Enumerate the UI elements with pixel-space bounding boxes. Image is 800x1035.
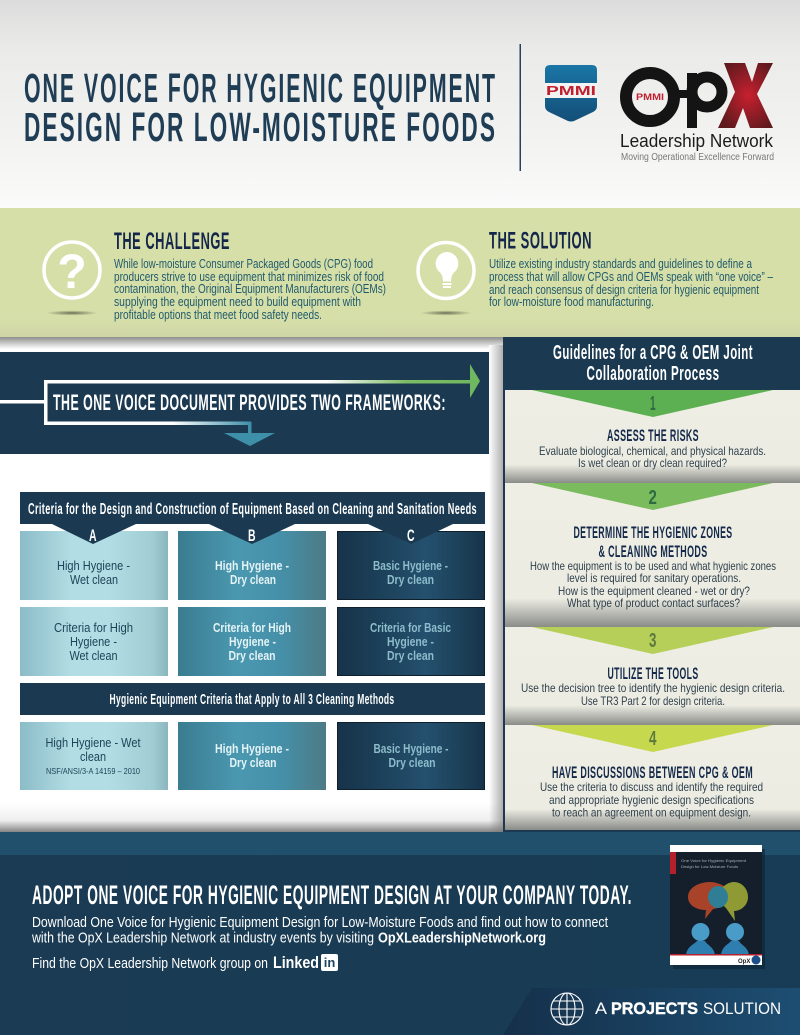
header divider [520, 44, 521, 171]
text: download copy: Download One Voice for Hygienic Equipment Design for Low-Moisture Foods and find out how to connect [32, 915, 608, 931]
heading: frameworks: THE ONE VOICE DOCUMENT PROVIDES TWO FRAMEWORKS: [53, 390, 446, 415]
step 2: 2 [648, 487, 658, 509]
header bar: criteria: Criteria for the Design and Construction of Equipment Based on Cleaning and Sanitation Needs [28, 501, 477, 518]
column C row 3: Basic Hygiene - [374, 742, 448, 756]
image: report cover: One Voice for Hygienic Equipment [681, 858, 747, 863]
step 3: 3 [649, 630, 657, 652]
column B row 2 [178, 607, 326, 676]
image: report cover [670, 845, 765, 969]
column C row 1: Dry clean [387, 573, 434, 587]
logo: OpX Leadership Network: Leadership Network [620, 131, 774, 151]
logo: PMMI shield [545, 65, 597, 122]
column C row 3: Dry clean [388, 756, 436, 770]
header bar: criteria: C [407, 526, 415, 545]
column A row 3: clean [80, 750, 106, 764]
badge: a projects solution [503, 988, 800, 1035]
panel: guidelines [503, 337, 800, 832]
text: challenge body [114, 257, 386, 322]
heading: the challenge: THE CHALLENGE [114, 228, 230, 255]
heading: guidelines [553, 342, 753, 385]
text: download copy: OpXLeadershipNetwork.org [378, 930, 546, 946]
text: challenge body: supplying the equipment need to build equipment with [114, 295, 361, 309]
text: solution body: for low-moisture food manufacturing. [489, 295, 654, 309]
column A row 3 [20, 722, 168, 790]
column B row 3: Dry clean [230, 756, 276, 770]
column B row 2: Hygiene - [229, 635, 276, 649]
panel: footer call to action [0, 832, 800, 1035]
column A row 3: High Hygiene - Wet [46, 736, 141, 750]
column B row 1 [178, 531, 326, 600]
column A row 1: High Hygiene - [57, 559, 130, 573]
header bar: criteria [20, 492, 485, 545]
step 4: and appropriate hygienic design specifications [549, 793, 754, 807]
step 1: Is wet clean or dry clean required? [578, 456, 727, 470]
column C row 1: Basic Hygiene - [373, 559, 448, 573]
column C row 2: Criteria for Basic [370, 621, 451, 635]
column B row 2: Criteria for High [213, 621, 291, 635]
heading: the solution: THE SOLUTION [489, 228, 592, 254]
header panel [0, 0, 800, 208]
title [24, 65, 497, 150]
step 3: UTILIZE THE TOOLS [608, 664, 698, 683]
column B row 1: Dry clean [230, 573, 276, 587]
image: report cover: OpX [738, 959, 750, 965]
step 4 [505, 725, 800, 830]
header bar: all three methods: Hygienic Equipment Criteria that Apply to All 3 Cleaning Methods [110, 691, 394, 708]
column B row 3: High Hygiene - [215, 742, 289, 756]
column A row 1: Wet clean [70, 573, 118, 587]
step 2: level is required for sanitary operations. [567, 571, 741, 585]
step 3: Use TR3 Part 2 for design criteria. [581, 694, 725, 708]
header bar: criteria: B [248, 526, 256, 545]
icon: light bulb [418, 242, 474, 316]
arrow: green framework arrow [0, 364, 480, 425]
arrow: blue framework arrow [44, 422, 275, 446]
step 1: 1 [650, 393, 656, 415]
column A row 3: NSF/ANSI/3-A 14159 – 2010 [46, 766, 140, 776]
column A row 2: Criteria for High [54, 621, 133, 635]
column C row 2: Hygiene - [387, 635, 434, 649]
panel: two frameworks [0, 337, 503, 832]
icon: globe [551, 993, 583, 1025]
logo: OpX Leadership Network: PMMI [636, 92, 664, 102]
column A row 2: Wet clean [70, 649, 118, 663]
text: challenge body: profitable options that meet food safety needs. [114, 308, 322, 322]
table: criteria [20, 492, 485, 790]
logo: OpX Leadership Network: Moving Operational Excellence Forward [621, 152, 774, 163]
text: challenge body: While low-moisture Consumer Packaged Goods (CPG) food [114, 257, 373, 271]
column A row 2: Hygiene - [70, 635, 117, 649]
column C row 2: Dry clean [387, 649, 434, 663]
header bar: all three methods [20, 683, 485, 715]
banner [0, 352, 489, 454]
logo: PMMI shield: PMMI [546, 83, 596, 98]
logo: OpX Leadership Network [620, 63, 774, 163]
text: download copy: Find the OpX Leadership Network group on [32, 956, 268, 972]
panel: challenge and solution band [0, 208, 800, 337]
text: download copy: with the OpX Leadership Network at industry events by visiting [31, 930, 374, 946]
step 1 [505, 390, 800, 483]
icon: LinkedIn wordmark: in [324, 955, 335, 970]
column C row 2 [338, 608, 484, 676]
step 1: ASSESS THE RISKS [607, 426, 699, 445]
step 4: 4 [649, 728, 657, 750]
column B row 2: Dry clean [228, 649, 276, 663]
column C row 1 [338, 532, 484, 600]
text: challenge body: contamination, the Original Equipment Manufacturers (OEMs) [114, 282, 386, 296]
step 4: to reach an agreement on equipment design. [552, 806, 751, 820]
icon: LinkedIn wordmark: Linked [273, 953, 319, 972]
header bar: criteria: A [89, 526, 97, 545]
step 3 [505, 627, 800, 725]
column A row 2 [20, 607, 168, 676]
badge: a projects solution: SOLUTION [703, 999, 781, 1018]
badge: a projects solution: PROJECTS [611, 999, 698, 1018]
text: challenge body: producers strive to use equipment that minimizes risk of food [114, 270, 384, 284]
badge: a projects solution: A [595, 999, 608, 1018]
text: download copy [31, 915, 608, 972]
column B row 1: High Hygiene - [215, 559, 289, 573]
column B row 3 [178, 722, 326, 790]
step 2: How is the equipment cleaned - wet or dry? [558, 584, 750, 598]
column C row 3 [338, 722, 484, 790]
icon: question mark [44, 242, 100, 316]
column A row 1 [20, 531, 168, 600]
step 2: What type of product contact surfaces? [567, 596, 740, 610]
icon: question mark: ? [57, 246, 87, 299]
image: report cover: Design for Low-Moisture Foods [681, 864, 738, 869]
text: solution body [489, 257, 773, 309]
step 2 [505, 483, 800, 627]
